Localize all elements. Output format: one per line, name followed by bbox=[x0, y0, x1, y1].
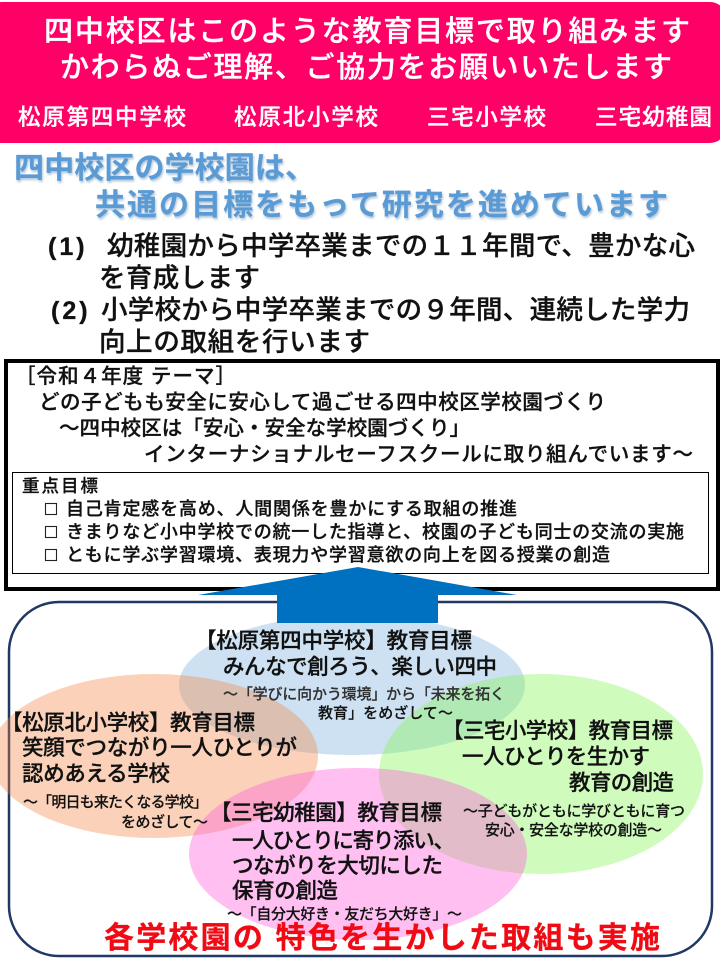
priority goals box bbox=[12, 472, 708, 574]
school names bbox=[18, 105, 712, 130]
venn circle: kita elementary bbox=[0, 674, 318, 838]
header title: かわらぬご理解、ご協力をお願いいたします bbox=[60, 51, 672, 84]
kita elementary goal: 【松原北小学校】教育目標 bbox=[1, 711, 255, 735]
theme text: ［令和４年度 テーマ］ bbox=[15, 365, 236, 388]
common goals list: 小学校から中学卒業までの９年間、連続した学力 bbox=[101, 295, 690, 325]
theme panel bbox=[6, 361, 718, 589]
blue heading: 四中校区の学校園は、 bbox=[14, 152, 315, 185]
school goals panel bbox=[0, 602, 712, 956]
common goals list: (1) bbox=[48, 233, 88, 261]
miyake elementary goal: 一人ひとりを生かす bbox=[462, 745, 650, 769]
theme text bbox=[15, 365, 693, 466]
junior high goal: ～「学びに向かう環境」から「未来を拓く bbox=[223, 686, 505, 703]
junior high goal: みんなで創ろう、楽しい四中 bbox=[223, 655, 497, 679]
miyake elementary goal: ～子どもがともに学びともに育つ bbox=[463, 802, 685, 820]
kita elementary goal: をめざして～ bbox=[121, 813, 208, 831]
venn circle: miyake elementary bbox=[379, 674, 703, 874]
priority goals box: 重点目標 bbox=[22, 476, 98, 496]
kindergarten goal: 保育の創造 bbox=[232, 879, 338, 903]
up arrow bbox=[198, 567, 517, 623]
miyake elementary goal bbox=[442, 719, 685, 839]
common goals list: (2) bbox=[51, 297, 91, 325]
common goals list: を育成します bbox=[99, 263, 260, 293]
miyake elementary goal: 【三宅小学校】教育目標 bbox=[442, 719, 673, 743]
kindergarten goal: 【三宅幼稚園】教育目標 bbox=[210, 801, 442, 825]
kita elementary goal: ～「明日も来たくなる学校」 bbox=[23, 794, 208, 811]
kita elementary goal bbox=[1, 711, 297, 831]
header banner bbox=[0, 2, 720, 143]
miyake elementary goal: 教育の創造 bbox=[569, 771, 674, 795]
junior high goal: 【松原第四中学校】教育目標 bbox=[195, 629, 472, 653]
common goals list bbox=[48, 231, 695, 357]
priority goals box: きまりなど小中学校での統一した指導と、校園の子ども同士の交流の実施 bbox=[66, 522, 684, 542]
kita elementary goal: 笑顔でつながり一人ひとりが bbox=[22, 736, 297, 760]
red closing message: 各学校園の 特色を生かした取組も実施 bbox=[104, 922, 660, 955]
priority goals box: 自己肯定感を高め、人間関係を豊かにする取組の推進 bbox=[66, 499, 517, 519]
priority goals box: ともに学ぶ学習環境、表現力や学習意欲の向上を図る授業の創造 bbox=[66, 545, 610, 565]
blue heading: 共通の目標をもって研究を進めています bbox=[95, 189, 668, 222]
kindergarten goal: つながりを大切にした bbox=[232, 854, 443, 878]
school names: 松原北小学校 bbox=[234, 105, 378, 130]
venn circle: junior high bbox=[179, 615, 525, 755]
theme text: ～四中校区は「安心・安全な学校園づくり」 bbox=[59, 417, 470, 440]
junior high goal bbox=[195, 629, 505, 722]
miyake elementary goal: 安心・安全な学校の創造～ bbox=[485, 822, 662, 839]
theme text: どの子どもも安全に安心して過ごせる四中校区学校園づくり bbox=[39, 391, 606, 414]
kindergarten goal: ～「自分大好き・友だち大好き」～ bbox=[227, 906, 462, 923]
school names: 三宅小学校 bbox=[427, 105, 546, 130]
common goals list: 幼稚園から中学卒業までの１１年間で、豊かな心 bbox=[107, 231, 695, 261]
school names: 三宅幼稚園 bbox=[595, 105, 712, 130]
header title bbox=[44, 15, 690, 84]
common goals list: 向上の取組を行います bbox=[99, 327, 370, 357]
kita elementary goal: 認めあえる学校 bbox=[22, 762, 170, 786]
theme text: インターナショナルセーフスクールに取り組んでいます～ bbox=[144, 443, 693, 466]
blue heading bbox=[14, 152, 668, 222]
junior high goal: 教育」をめざして～ bbox=[318, 704, 453, 722]
header title: 四中校区はこのような教育目標で取り組みます bbox=[44, 15, 690, 48]
venn circle: kindergarten bbox=[189, 768, 527, 940]
kindergarten goal: 一人ひとりに寄り添い、 bbox=[232, 829, 455, 853]
kindergarten goal bbox=[210, 801, 462, 923]
school names: 松原第四中学校 bbox=[18, 105, 186, 130]
